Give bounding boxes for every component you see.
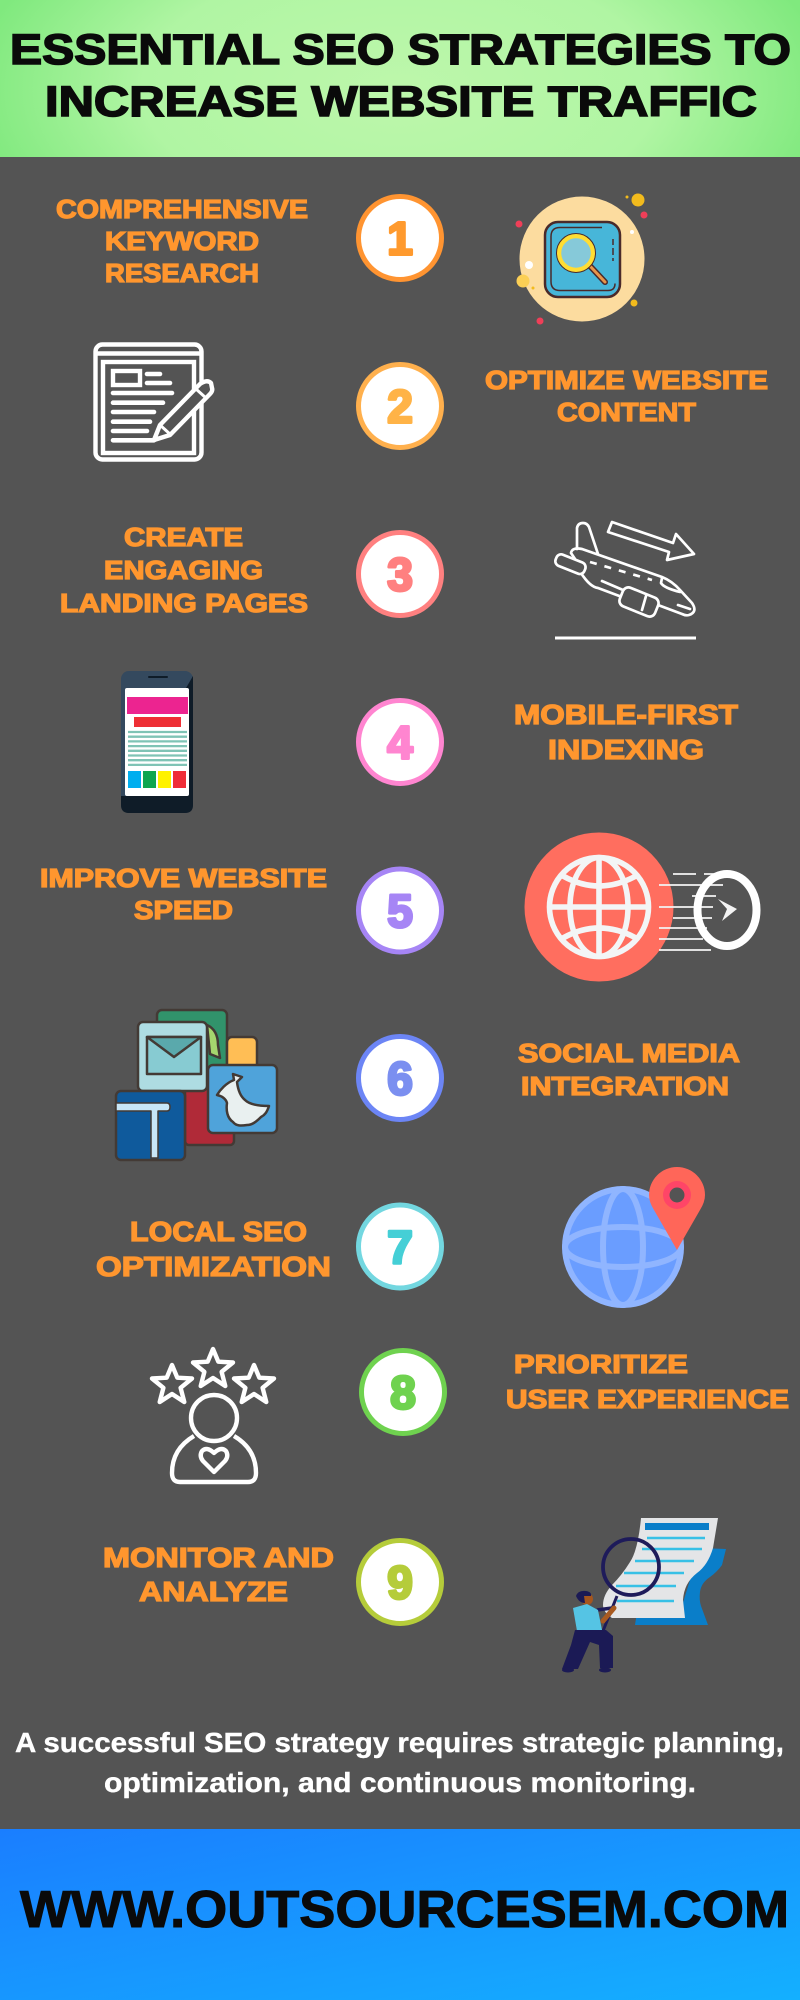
icon: user with rating stars xyxy=(152,1349,274,1482)
label: social media integration: INTEGRATION xyxy=(521,1071,729,1101)
number badge 2: 2 xyxy=(387,380,413,432)
number badge 1 xyxy=(358,196,442,280)
label: comprehensive keyword research: RESEARCH xyxy=(105,258,259,288)
label: monitor and analyze: MONITOR AND xyxy=(103,1542,334,1573)
label: create engaging landing pages xyxy=(60,522,308,618)
summary text: A successful SEO strategy requires strategic planning, xyxy=(15,1727,784,1758)
label: social media integration: SOCIAL MEDIA xyxy=(518,1038,740,1068)
step 9 xyxy=(103,1518,726,1672)
label: monitor and analyze xyxy=(103,1542,334,1607)
title: ESSENTIAL SEO STRATEGIES TO xyxy=(10,26,791,74)
icon: globe with map pin xyxy=(565,1167,705,1305)
label: comprehensive keyword research: KEYWORD xyxy=(105,226,259,256)
number badge 6 xyxy=(358,1036,442,1120)
label: comprehensive keyword research: COMPREHENSIVE xyxy=(56,194,308,224)
step 3 xyxy=(60,522,696,640)
icon: airplane landing xyxy=(554,522,694,618)
number badge 3 xyxy=(358,532,442,616)
label: prioritize user experience xyxy=(506,1349,789,1414)
website url: WWW.OUTSOURCESEM.COM xyxy=(20,1881,789,1939)
step 7 xyxy=(96,1167,705,1305)
label: optimize website content: OPTIMIZE WEBSITE xyxy=(485,365,768,395)
label: optimize website content: CONTENT xyxy=(557,397,696,427)
number badge 4: 4 xyxy=(387,716,413,768)
title xyxy=(10,26,791,126)
step 4 xyxy=(121,671,738,813)
summary text: optimization, and continuous monitoring. xyxy=(104,1767,696,1798)
ground line xyxy=(555,636,696,640)
label: create engaging landing pages: CREATE xyxy=(124,522,243,552)
number badge 6: 6 xyxy=(387,1052,413,1104)
number badge 8: 8 xyxy=(390,1366,416,1418)
icon: document with pencil xyxy=(96,344,212,460)
label: optimize website content xyxy=(485,365,768,427)
label: local seo optimization xyxy=(96,1216,331,1282)
icon: fast globe xyxy=(524,832,756,982)
label: create engaging landing pages: LANDING PAGES xyxy=(60,588,308,618)
label: monitor and analyze: ANALYZE xyxy=(139,1576,288,1607)
number badge 1: 1 xyxy=(387,212,413,264)
label: mobile-first indexing xyxy=(514,699,738,765)
icon: social media app tiles xyxy=(116,1010,277,1160)
step 6 xyxy=(116,1010,740,1160)
icon: smartphone xyxy=(121,671,193,813)
number badge 8 xyxy=(362,1350,444,1434)
icon: magnifier on blue tile xyxy=(516,194,648,324)
number badge 9 xyxy=(358,1540,442,1624)
label: local seo optimization: LOCAL SEO xyxy=(130,1216,307,1247)
number badge 4 xyxy=(358,700,442,784)
label: create engaging landing pages: ENGAGING xyxy=(104,555,263,585)
number badge 5 xyxy=(358,869,442,952)
number badge 7 xyxy=(358,1205,442,1288)
footer banner xyxy=(0,1829,800,2000)
label: prioritize user experience: USER EXPERIENCE xyxy=(506,1384,789,1414)
label: mobile-first indexing: MOBILE-FIRST xyxy=(514,699,738,730)
number badge 7: 7 xyxy=(387,1221,413,1273)
label: social media integration xyxy=(518,1038,740,1101)
label: mobile-first indexing: INDEXING xyxy=(548,734,704,765)
label: prioritize user experience: PRIORITIZE xyxy=(514,1349,688,1379)
icon: person inspecting document xyxy=(562,1518,726,1672)
step 2 xyxy=(96,344,768,460)
step 1 xyxy=(56,194,648,324)
label: comprehensive keyword research xyxy=(56,194,308,288)
title: INCREASE WEBSITE TRAFFIC xyxy=(45,78,757,126)
number badge 2 xyxy=(358,364,442,448)
label: improve website speed: IMPROVE WEBSITE xyxy=(40,863,327,893)
number badge 5: 5 xyxy=(387,885,413,937)
summary text xyxy=(15,1727,784,1798)
header banner xyxy=(0,0,800,157)
label: local seo optimization: OPTIMIZATION xyxy=(96,1251,331,1282)
step 5 xyxy=(40,832,756,982)
number badge 3: 3 xyxy=(387,548,413,600)
label: improve website speed: SPEED xyxy=(134,895,233,925)
number badge 9: 9 xyxy=(387,1556,413,1608)
step 8 xyxy=(152,1349,789,1482)
label: improve website speed xyxy=(40,863,327,925)
